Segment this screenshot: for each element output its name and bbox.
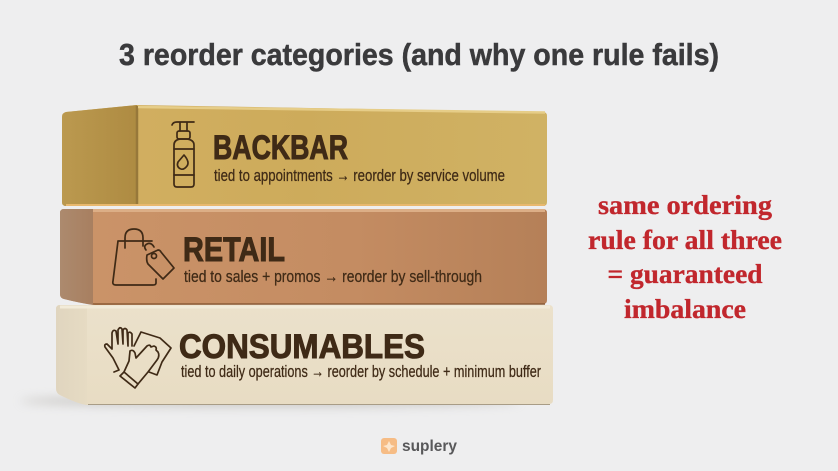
text: consumables description: tied to daily operations → reorder by schedule + minimum buffer [181, 362, 541, 381]
icon: pump bottle with drop [172, 122, 194, 187]
callout: imbalance warning: rule for all three [588, 225, 782, 255]
block: backbar [62, 105, 547, 206]
block: retail [60, 209, 547, 305]
callout: imbalance warning: = guaranteed [608, 259, 762, 289]
title: 3 reorder categories (and why one rule fails) [119, 37, 719, 72]
icon: gloves and cloth [105, 328, 171, 388]
block: consumables [56, 305, 553, 405]
callout: imbalance warning: same ordering [598, 190, 773, 220]
logo: suplery: suplery [402, 438, 457, 455]
callout: imbalance warning [588, 190, 782, 324]
icon: shopping bag with tag [113, 229, 174, 285]
heading: backbar: BACKBAR [213, 129, 348, 167]
ground shadow [20, 395, 520, 407]
text: backbar description: tied to appointments → reorder by service volume [214, 166, 505, 185]
callout: imbalance warning: imbalance [624, 294, 746, 324]
heading: retail: RETAIL [183, 231, 285, 269]
heading: consumables: CONSUMABLES [179, 328, 425, 366]
text: retail description: tied to sales + promos → reorder by sell-through [184, 267, 482, 286]
